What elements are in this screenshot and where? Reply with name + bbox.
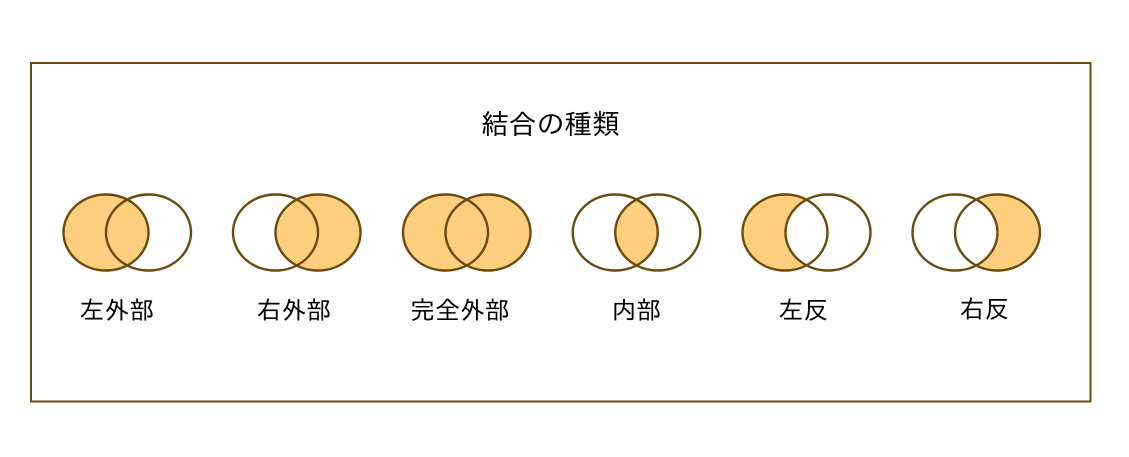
label: right outer: 右外部 (256, 297, 332, 325)
venn: inner join (573, 194, 700, 270)
venn: left outer join (64, 194, 191, 270)
venn: right anti join (912, 194, 1040, 270)
label: left anti: 左反 (778, 297, 828, 325)
venn: left anti join (742, 194, 870, 270)
title: 結合の種類 (481, 109, 620, 140)
label: full outer: 完全外部 (410, 297, 510, 325)
label: inner: 内部 (612, 297, 662, 325)
panel: outer frame (31, 63, 1090, 402)
venn: right outer join (233, 194, 360, 270)
venn: full outer join (403, 194, 530, 270)
label: left outer: 左外部 (80, 297, 154, 325)
label: right anti: 右反 (960, 296, 1010, 324)
